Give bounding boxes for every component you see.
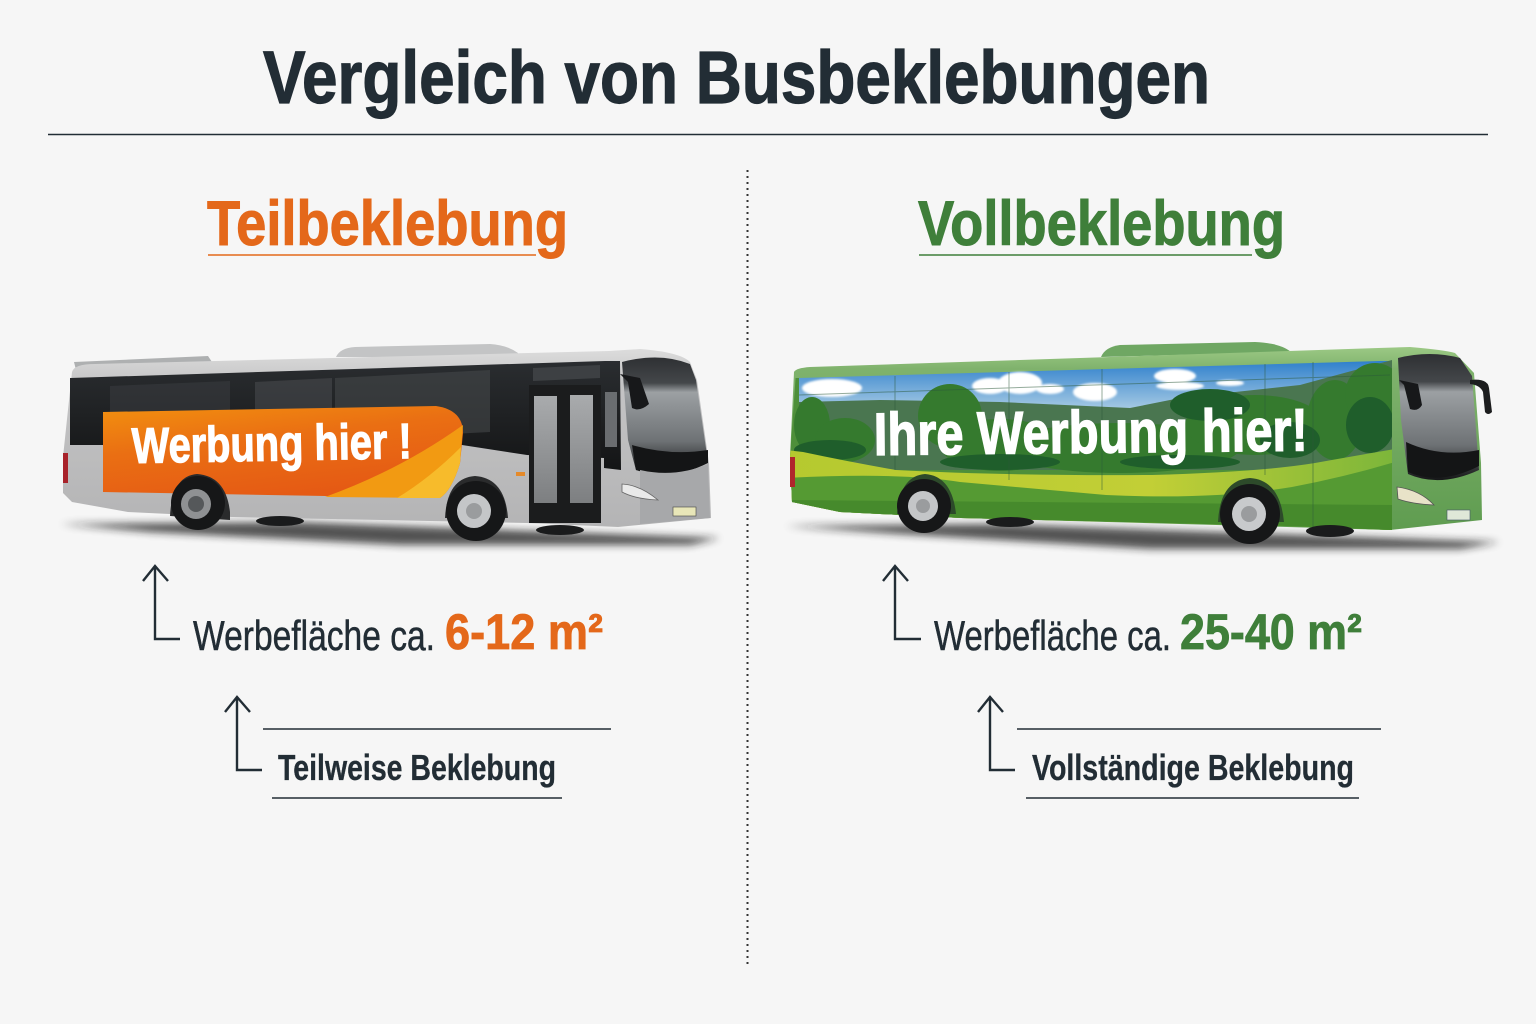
text: advertising area: Werbefläche ca. (934, 612, 1171, 659)
arrow: area (143, 566, 180, 639)
text: advertising area: Werbefläche ca. (193, 612, 435, 659)
text: advertising area (934, 604, 1362, 660)
windshield (622, 357, 708, 474)
mirror (1470, 380, 1492, 414)
arrow: coverage (225, 697, 262, 770)
arrow: area (883, 566, 921, 639)
headlight and plate (1397, 487, 1434, 505)
door (529, 385, 601, 523)
bus: full wrap (785, 342, 1500, 549)
ad text: Werbung hier ! (131, 413, 412, 474)
text: advertising area: 6-12 m² (445, 604, 603, 660)
arrow: coverage (978, 697, 1015, 770)
text: advertising area (193, 604, 603, 660)
front wheel (445, 476, 508, 541)
landscape wrap (785, 360, 1405, 538)
heading: Teilbeklebung: Teilbeklebung (207, 189, 568, 259)
panel: Teilbeklebung (60, 189, 720, 798)
text: advertising area: 25-40 m² (1180, 604, 1362, 660)
title: Vergleich von Busbeklebungen (263, 36, 1210, 119)
windshield (1398, 354, 1479, 480)
front wheel (1218, 478, 1284, 544)
ad text: Ihre Werbung hier! (873, 396, 1308, 468)
advertising wrap (103, 406, 463, 498)
headlight and plate (622, 484, 658, 500)
rear wheel (170, 474, 230, 530)
text: coverage: Vollständige Beklebung (1032, 747, 1354, 788)
rear wheel (897, 474, 956, 533)
bus: partial wrap (60, 344, 720, 545)
heading: Vollbeklebung: Vollbeklebung (918, 189, 1285, 259)
panel: Vollbeklebung (785, 189, 1500, 798)
text: coverage: Teilweise Beklebung (278, 747, 556, 788)
